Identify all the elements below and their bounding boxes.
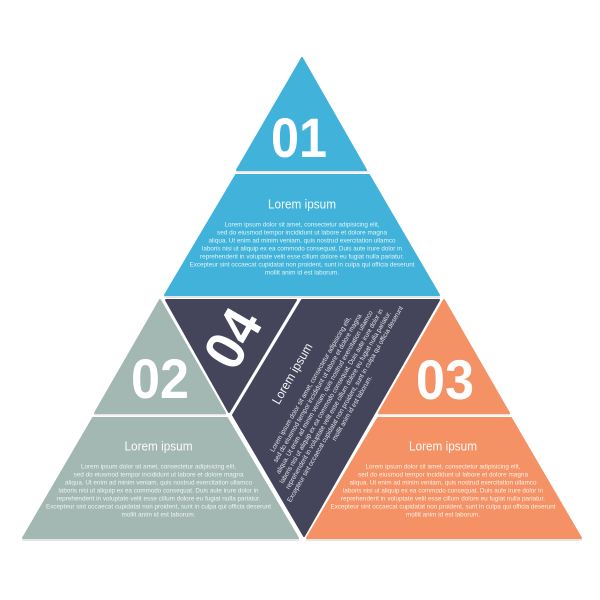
text block: 01: reprehenderit in voluptate velit esse cillum dolore eu fugiat nulla pariatur. [200, 254, 404, 261]
text block: 03: laboris nisi ut aliquip ex ea commodo consequat. Duis aute irure dolor in [343, 488, 543, 495]
heading: 01: Lorem ipsum [268, 198, 336, 212]
text block: 03: sed do eiusmod tempor incididunt ut labore et dolore magna [358, 472, 528, 479]
triangle: 02 [95, 300, 225, 413]
text block: 04: sed do eiusmod tempor incididunt ut labore et dolore magna [272, 313, 364, 464]
panel: 02 left section [23, 300, 298, 540]
text block: 02: Excepteur sint occaecat cupidatat non proident, sunt in culpa qui officia deserunt [46, 504, 271, 511]
panel: 03 right section [307, 300, 581, 540]
text block: 01: mollit anim id est laborum. [265, 270, 339, 277]
trapezoid: 01 body [165, 175, 439, 295]
text block: 02: reprehenderit in voluptate velit esse cillum dolore eu fugiat nulla pariatur. [56, 496, 261, 503]
text block: 02: laboris nisi ut aliquip ex ea commodo consequat. Duis aute irure dolor in [58, 488, 259, 495]
text block: 01: Excepteur sint occaecat cupidatat non proident, sunt in culpa qui officia deserunt [190, 262, 415, 269]
panel: 01 top section [165, 58, 439, 297]
rotated text: 04 [230, 273, 412, 508]
text block: 03: Excepteur sint occaecat cupidatat non proident, sunt in culpa qui officia deserunt [330, 504, 556, 511]
number: 01: 01 [271, 106, 327, 169]
text block: 02 [46, 464, 271, 519]
text block: 01: Lorem ipsum dolor sit amet, consectetur adipisicing elit, [224, 222, 380, 229]
text block: 01 [190, 222, 415, 277]
trapezoid: 03 body [307, 418, 581, 538]
text block: 04: Lorem ipsum dolor sit amet, consectetur adipisicing elit, [269, 316, 353, 453]
heading: 02: Lorem ipsum [124, 440, 192, 454]
text block: 03 [330, 464, 556, 519]
text block: 03: aliqua. Ut enim ad minim veniam, quis nostrud exercitation ullamco [350, 480, 537, 487]
triangle: 03 [379, 300, 509, 413]
text block: 04: laboris nisi ut aliquip ex ea commodo consequat. Duis aute irure dolor in [279, 308, 385, 485]
number: 03: 03 [416, 348, 474, 411]
text block: 02: mollit anim id est laborum. [122, 512, 196, 519]
text block: 03: reprehenderit in voluptate velit esse cillum dolore eu fugiat nulla pariatur. [341, 496, 545, 503]
parallelogram: 04 body [233, 300, 439, 536]
text block: 04: Excepteur sint occaecat cupidatat non proident, sunt in culpa qui officia deserunt [286, 305, 405, 504]
panel: 04 inverted center section [166, 273, 439, 536]
text block: 01: aliqua. Ut enim ad minim veniam, quis nostrud exercitation ullamco [208, 238, 396, 245]
trapezoid: 02 body [23, 418, 298, 538]
text block: 04: reprehenderit in voluptate velit esse cillum dolore eu fugiat nulla pariatur. [285, 310, 393, 491]
text block: 03: mollit anim id est laborum. [406, 512, 480, 519]
text block: 02: Lorem ipsum dolor sit amet, consectetur adipisicing elit, [81, 464, 236, 471]
text block: 04: aliqua. Ut enim ad minim veniam, quis nostrud exercitation ullamco [275, 310, 375, 475]
text block: 02: aliqua. Ut enim ad minim veniam, quis nostrud exercitation ullamco [65, 480, 252, 487]
text block: 01: laboris nisi ut aliquip ex ea commodo consequat. Duis aute irure dolor in [202, 246, 402, 253]
heading: 04: Lorem ipsum [269, 341, 316, 407]
triangle: 01 [237, 58, 366, 170]
text block: 01: sed do eiusmod tempor incididunt ut labore et dolore magna [217, 230, 387, 237]
triangle: 04 [166, 300, 296, 412]
heading: 03: Lorem ipsum [409, 440, 477, 454]
text block: 02: sed do eiusmod tempor incididunt ut labore et dolore magna [74, 472, 244, 479]
number: 04: 04 [191, 297, 274, 379]
text block: 04: mollit anim id est laborum. [331, 375, 374, 442]
number: 02: 02 [131, 347, 189, 410]
text block: 03: Lorem ipsum dolor sit amet, consectetur adipisicing elit, [366, 464, 521, 471]
